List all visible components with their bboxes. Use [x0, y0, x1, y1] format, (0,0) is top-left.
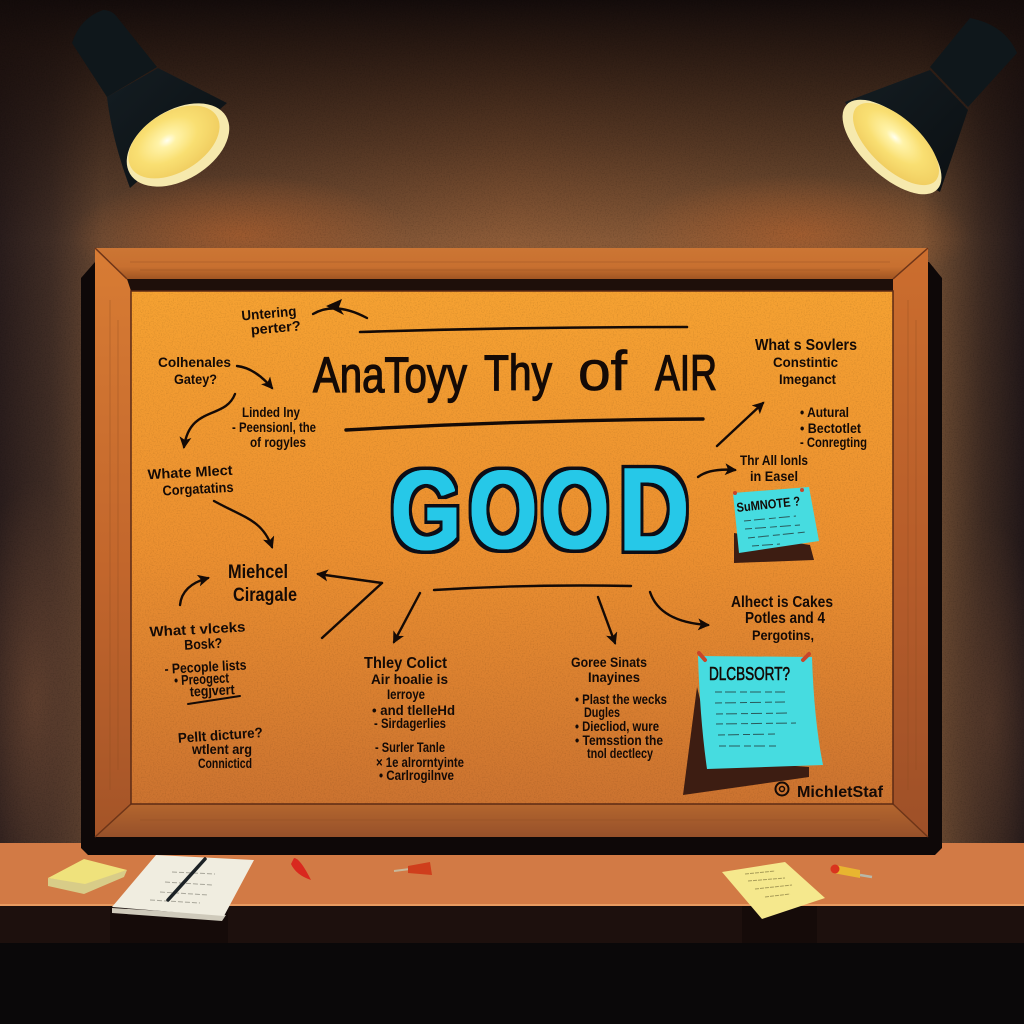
arrows	[180, 299, 763, 643]
text: top right question: What s Sovlers	[755, 337, 857, 354]
text: upper left question: Gatey?	[174, 371, 217, 387]
text: centre left list: - Surler Tanle	[375, 739, 445, 755]
icon: left spotlight	[72, 10, 244, 204]
text: centre right list: • Temsstion the	[575, 732, 663, 748]
text: left question: Corgatatins	[162, 479, 234, 498]
text: top question: Untering	[241, 303, 297, 323]
text: centre right list: Goree Sinats	[571, 654, 647, 670]
text: centre left list	[364, 655, 464, 783]
text: Miehcel Ciragale: Miehcel	[228, 562, 288, 583]
desk item: yellow note	[722, 862, 825, 943]
text: centre left list: Ierroye	[387, 686, 425, 702]
text: above small note: Thr All lonls	[740, 452, 808, 468]
sticky note: small: SuMNOTE ?	[736, 493, 801, 515]
sticky note: small	[733, 487, 819, 563]
text: centre right list: • Diecliod, wure	[575, 718, 659, 734]
text: top right list	[800, 404, 867, 450]
signature: MichletStaf	[797, 784, 884, 801]
desk item: yellow push pin	[830, 864, 872, 878]
text: lower left question: Bosk?	[184, 635, 223, 653]
title rule: top	[360, 327, 687, 332]
wooden frame	[95, 248, 928, 837]
text: centre left list: Air hoalie is	[371, 671, 448, 687]
frame shadow	[81, 262, 942, 855]
text: centre right list: Inayines	[588, 669, 640, 685]
text: Miehcel Ciragale: Ciragale	[233, 585, 297, 606]
text: right question	[731, 594, 833, 643]
text: lower left question: - Pecople lists	[164, 657, 247, 677]
sticky note: large: DLCBSORT?	[709, 664, 790, 684]
desk item: sticky pad	[48, 859, 127, 894]
desk item: red push pin	[394, 862, 432, 875]
desk item: red marker	[291, 858, 311, 880]
text: left question: Whate Mlect	[147, 462, 233, 482]
text: centre left list: • and tlelleHd	[372, 702, 455, 718]
text: upper left question: Colhenales	[158, 354, 231, 370]
text: upper left question	[158, 354, 231, 387]
text: centre right list: tnol dectlecy	[587, 745, 653, 761]
text: Miehcel Ciragale	[228, 562, 297, 606]
cork board	[131, 291, 893, 804]
title rule: bottom	[346, 419, 703, 430]
heading: GOOD	[391, 444, 689, 576]
text: lower left question: tegjvert	[189, 681, 235, 699]
heading: GOOD: G	[391, 448, 461, 573]
title	[313, 339, 717, 403]
text: centre right list: • Plast the wecks	[575, 691, 667, 707]
underline	[188, 696, 240, 704]
text: centre right list: Dugles	[584, 704, 620, 720]
text: right question: Pergotins,	[752, 627, 814, 643]
heading: GOOD: O	[469, 449, 537, 572]
text: upper left list: of rogyles	[250, 434, 306, 450]
text: lower left note	[177, 724, 263, 771]
title: AIR	[655, 345, 717, 401]
text: above small note	[740, 452, 808, 484]
text: top right question: Constintic	[773, 354, 838, 370]
icon: right spotlight	[827, 18, 1017, 210]
text: top question	[241, 302, 301, 338]
text: lower left note: wtlent arg	[191, 741, 252, 757]
text: upper left list	[232, 404, 316, 450]
title: Thy	[484, 345, 552, 401]
desk item: papers and pen	[110, 855, 254, 943]
text: right question: Alhect is Cakes	[731, 594, 833, 611]
title: of	[578, 339, 627, 402]
text: top right list: • Autural	[800, 404, 849, 420]
text: lower left note: Connicticd	[198, 755, 252, 771]
text: lower left question: What t vlceks	[149, 619, 246, 640]
text: top question: perter?	[250, 317, 301, 338]
text: lower left question	[149, 619, 249, 701]
text: above small note: in Easel	[750, 468, 798, 484]
text: left question	[147, 462, 234, 499]
text: centre right list	[571, 654, 667, 761]
text: right question: Potles and 4	[745, 610, 825, 627]
title: AnaToyy	[313, 347, 467, 403]
heading: GOOD: O	[541, 449, 609, 572]
text: top right list: • Bectotlet	[800, 420, 861, 436]
sticky note: large	[683, 653, 823, 795]
text: lower left note: Pellt dicture?	[177, 724, 263, 746]
text: top right question	[755, 337, 857, 387]
text: centre left list: - Sirdagerlies	[374, 715, 446, 731]
text: lower left question: • Preogect	[174, 669, 230, 688]
text: top right question: Imeganct	[779, 371, 836, 387]
text: top right list: - Conregting	[800, 434, 867, 450]
heading: GOOD: D	[619, 444, 689, 576]
text: upper left list: - Peensionl, the	[232, 419, 316, 435]
text: centre left list: Thley Colict	[364, 655, 448, 672]
text: centre left list: • Carlrogilnve	[379, 767, 454, 783]
text: centre left list: × 1e alrorntyinte	[376, 754, 464, 770]
text: upper left list: Linded lny	[242, 404, 300, 420]
shelf	[0, 843, 1024, 1024]
